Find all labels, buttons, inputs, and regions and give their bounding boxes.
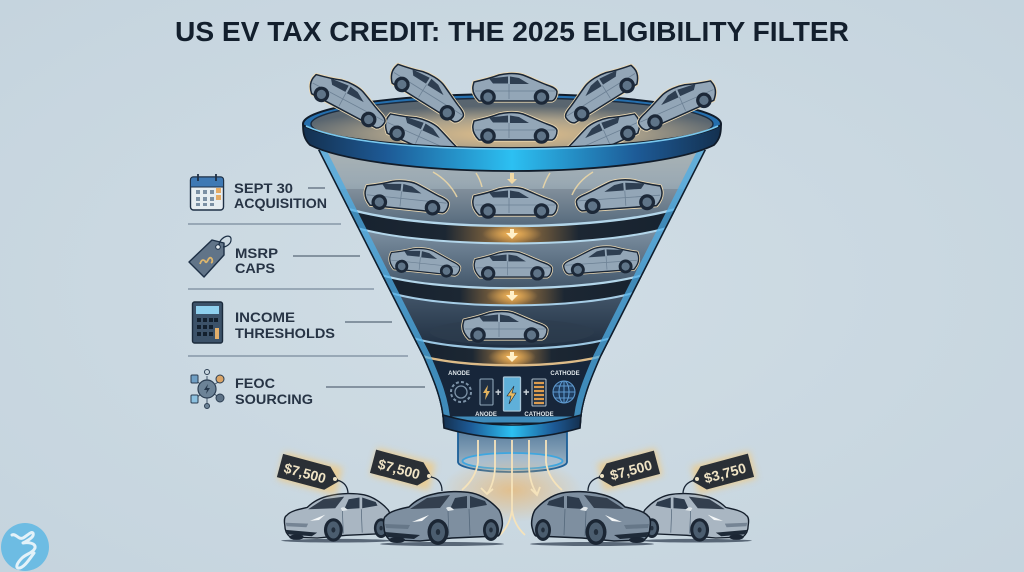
title: US EV TAX CREDIT: THE 2025 ELIGIBILITY FILTER bbox=[175, 16, 849, 47]
cars entering the funnel bbox=[304, 56, 721, 136]
label: FEOC bbox=[235, 376, 275, 391]
lip highlight bbox=[306, 126, 718, 149]
battery sourcing tier bbox=[448, 371, 580, 418]
leader line bbox=[293, 255, 360, 257]
cars tier one bbox=[363, 177, 663, 219]
label: MSRP bbox=[235, 246, 278, 261]
filter: income thresholds: THRESHOLDS bbox=[235, 326, 335, 341]
funnel spout bbox=[458, 432, 567, 472]
light streams from spout bbox=[442, 440, 582, 535]
car tier three bbox=[463, 312, 547, 343]
filter: MSRP caps bbox=[189, 236, 360, 277]
price tag: $7,500 bbox=[376, 456, 422, 482]
filter: MSRP caps: CAPS bbox=[235, 261, 275, 276]
logo badge bbox=[1, 523, 49, 571]
icon: battery left bbox=[480, 379, 493, 405]
icon: calculator bbox=[192, 302, 222, 343]
label: SEPT 30 bbox=[234, 181, 293, 196]
leader line bbox=[345, 321, 392, 323]
car with $3,750 credit far right bbox=[640, 451, 757, 542]
funnel body tiers bbox=[318, 150, 706, 424]
car with $7,500 credit far left bbox=[277, 452, 393, 542]
icon: battery centre bbox=[504, 377, 520, 411]
funnel front lip bbox=[303, 125, 721, 171]
leader line bbox=[326, 386, 425, 388]
filter: FEOC sourcing bbox=[191, 370, 425, 408]
icon: globe bbox=[553, 381, 575, 403]
label: INCOME bbox=[235, 310, 295, 325]
icon: battery right bbox=[532, 379, 546, 406]
icon: calendar bbox=[190, 174, 224, 210]
filter: FEOC sourcing: SOURCING bbox=[235, 392, 313, 407]
battery sourcing tier: CATHODE bbox=[524, 412, 554, 418]
battery sourcing tier: CATHODE bbox=[550, 371, 580, 377]
battery sourcing tier: ANODE bbox=[448, 371, 470, 377]
leader line bbox=[308, 187, 325, 189]
funnel collar bbox=[443, 415, 581, 438]
battery sourcing tier: ANODE bbox=[475, 412, 497, 418]
car with $7,500 credit centre left bbox=[370, 448, 504, 546]
price tag: $7,500 bbox=[282, 460, 328, 486]
filter: income thresholds bbox=[192, 302, 392, 343]
cars inside funnel mouth bbox=[384, 110, 641, 146]
tier arrows and flow bbox=[433, 172, 593, 366]
cars tier two bbox=[388, 245, 640, 281]
filter list bbox=[188, 174, 425, 408]
plus signs bbox=[496, 390, 529, 395]
car with $7,500 credit centre right bbox=[530, 448, 663, 546]
price tag: $7,500 bbox=[608, 457, 654, 483]
funnel mouth bbox=[303, 94, 721, 154]
icon: price tag bbox=[189, 236, 231, 277]
icon: gear bbox=[451, 382, 471, 402]
funnel bbox=[300, 94, 724, 472]
filter: Sept 30 acquisition bbox=[190, 174, 327, 211]
icon: network bbox=[191, 370, 224, 408]
filter: Sept 30 acquisition: ACQUISITION bbox=[234, 196, 327, 211]
price tag: $3,750 bbox=[702, 460, 748, 486]
